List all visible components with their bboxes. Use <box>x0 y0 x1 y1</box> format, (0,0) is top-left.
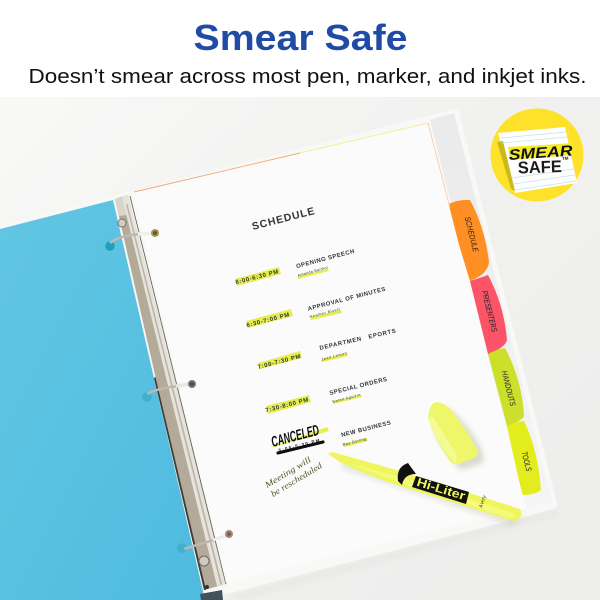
tab: tools: TOOLS <box>520 451 533 473</box>
ring: middle <box>142 380 196 402</box>
badge paper note <box>497 127 577 193</box>
rings <box>105 229 233 553</box>
tab: presenters <box>470 275 507 354</box>
row: 7:30 <box>265 377 388 414</box>
handwriting: note: be rescheduled <box>269 460 324 499</box>
row: 6:30 <box>246 287 386 329</box>
schedule document <box>235 205 396 499</box>
row: 6:30: 6:30-7:00 PM <box>246 312 290 329</box>
metal ring spine <box>115 195 226 600</box>
row: new business: Ray Gerling <box>342 437 366 447</box>
ring: top <box>105 229 159 251</box>
handwriting: canceled: 5:00-5:30 PM <box>278 438 320 453</box>
tab: tools <box>507 421 541 495</box>
tab: schedule <box>447 200 489 281</box>
pen small mark: Avery <box>478 494 488 509</box>
pen logo <box>398 463 469 504</box>
paper sheet <box>133 123 526 583</box>
row: 6:00: 6:00-6:30 PM <box>235 269 279 286</box>
badge: smear safe <box>490 108 584 202</box>
row: 6:00: Amanda Barthol <box>297 266 328 278</box>
binder cover <box>0 109 562 600</box>
blue divider <box>0 200 205 600</box>
title: Smear Safe <box>194 17 408 58</box>
row: 7:00 <box>257 329 396 371</box>
tab: schedule: SCHEDULE <box>463 216 480 253</box>
row: 7:30: 7:30-8:00 PM <box>265 397 309 414</box>
badge: smear safe: TM <box>562 156 569 161</box>
tab: handouts <box>488 348 524 426</box>
badge: smear safe: SAFE <box>517 157 562 177</box>
row: 7:00: DEPARTMEN EPORTS <box>319 329 396 352</box>
subtitle: Doesn’t smear across most pen, marker, and inkjet inks. <box>28 65 586 88</box>
handwriting: canceled <box>269 422 329 453</box>
row: 6:30: APPROVAL OF MINUTES <box>307 287 386 313</box>
ring: bottom <box>177 530 233 553</box>
tab: presenters: PRESENTERS <box>480 290 499 333</box>
row: 7:00: Jean Lemon <box>321 351 347 362</box>
row: 7:30: SPECIAL ORDERS <box>329 377 388 397</box>
pen logo: Hi-Liter <box>415 475 467 503</box>
tab: handouts: HANDOUTS <box>500 370 517 407</box>
highlighter cap <box>428 402 483 470</box>
row: 7:30: Karen Aguirre <box>332 393 361 404</box>
heading: schedule: SCHEDULE <box>251 205 317 233</box>
handwriting: note: Meeting will <box>262 454 313 490</box>
highlighter pen <box>328 452 522 526</box>
row: new business: NEW BUSINESS <box>341 420 392 439</box>
badge highlight <box>508 143 575 160</box>
row: 6:00: OPENING SPEECH <box>296 249 355 270</box>
badge text: SMEAR <box>508 143 573 164</box>
row: 6:30: Heather Bluett <box>309 307 341 319</box>
row: new business <box>341 420 392 447</box>
handwriting: canceled: CANCELED <box>269 422 321 451</box>
row: 6:00 <box>235 249 355 286</box>
row: 7:00: 7:00-7:30 PM <box>257 354 301 371</box>
orange and yellow sheet edges <box>134 123 450 208</box>
handwriting: note <box>262 454 324 499</box>
